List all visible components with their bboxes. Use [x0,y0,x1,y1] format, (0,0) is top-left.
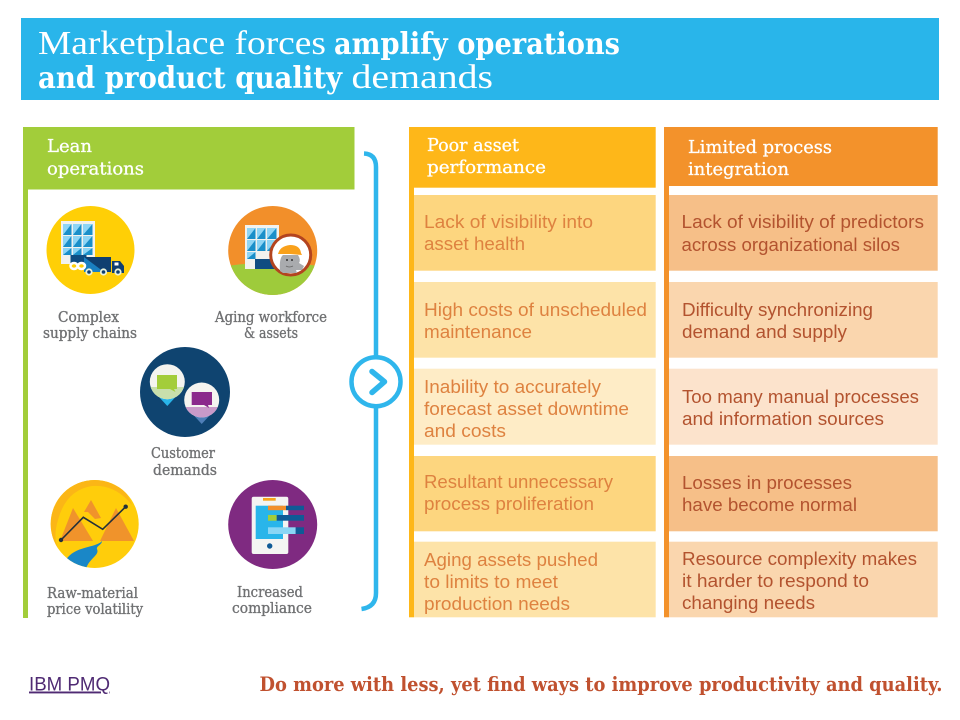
item: resource complexity [669,542,938,617]
title text [38,25,620,96]
item: losses in processes: Losses in processes [682,472,852,493]
icon: complex supply chains [46,206,134,294]
limited process integration heading [664,127,938,186]
panel: lean operations [23,127,354,618]
item: resultant process proliferation [414,456,656,531]
item: resource complexity: it harder to respond to [682,570,869,591]
panel left bar [23,127,28,618]
poor asset performance heading: Poor asset [427,135,520,156]
label: customer demands: demands [153,463,217,479]
label: raw-material price volatility: Raw-material [47,586,138,602]
poor asset performance heading: performance [427,157,546,178]
item: aging assets pushed: production needs [424,593,570,614]
item: losses in processes [669,456,938,531]
poor asset performance heading [409,127,656,188]
item: aging assets pushed: Aging assets pushed [424,549,598,570]
item: inability to forecast: and costs [424,420,506,441]
item: inability to forecast: Inability to accurately [424,376,602,397]
lean operations heading: operations [47,158,144,180]
item: inability to forecast [414,369,656,445]
panel: limited process integration [664,127,938,617]
item: resource complexity: changing needs [682,592,815,613]
item: high costs of unscheduled maintenance: maintenance [424,321,532,342]
label: complex supply chains: supply chains [43,326,137,342]
item: lack of visibility of predictors [669,195,938,271]
limited process integration heading: integration [688,159,789,180]
item: aging assets pushed [414,542,656,617]
link: IBM PMQ: IBM PMQ [29,674,110,696]
item: lack of visibility into asset health: asset health [424,233,525,254]
label: raw-material price volatility [47,586,144,618]
icon: aging workforce and assets [226,206,320,297]
item: aging assets pushed: to limits to meet [424,571,558,592]
arrow: bracket with chevron [352,154,400,609]
item: resource complexity: Resource complexity makes [682,548,917,569]
item: difficulty synchronizing: demand and supply [682,321,848,342]
label: aging workforce and assets: & assets [244,326,298,342]
item: losses in processes: have become normal [682,494,857,515]
item: resultant process proliferation: Resultant unnecessary [424,471,614,492]
icon: increased compliance [228,480,317,569]
label: complex supply chains [43,310,137,342]
title text: Marketplace forces [38,25,326,62]
item: too many manual processes [669,369,938,445]
item: too many manual processes: and information sources [682,408,884,429]
item: high costs of unscheduled maintenance [414,282,656,358]
label: raw-material price volatility: price volatility [47,602,144,618]
label: aging workforce and assets [214,310,327,342]
item: lack of visibility of predictors: Lack of visibility of predictors [682,211,924,232]
item: high costs of unscheduled maintenance: High costs of unscheduled [424,299,647,320]
label: complex supply chains: Complex [58,310,119,326]
title text: demands [352,59,493,96]
item: lack of visibility into asset health: Lack of visibility into [424,211,593,232]
label: increased compliance [232,585,312,617]
column left bar [409,127,414,617]
title banner [21,18,939,100]
column left bar [664,127,669,617]
title text: and product quality [38,61,343,96]
lean operations heading: Lean [47,136,92,157]
icon: customer demands [140,347,230,437]
icon: raw-material price volatility [50,480,139,572]
panel: poor asset performance [409,127,656,617]
title text: amplify operations [334,27,620,62]
item: too many manual processes: Too many manual processes [682,386,919,407]
item: lack of visibility into asset health [414,195,656,271]
item: difficulty synchronizing [669,282,938,358]
limited process integration heading: Limited process [688,137,832,158]
label: increased compliance: compliance [232,601,312,617]
item: resultant process proliferation: process proliferation [424,493,594,514]
item: inability to forecast: forecast asset downtime [424,398,629,419]
label: increased compliance: Increased [237,585,303,601]
label: customer demands: Customer [151,446,215,462]
item: difficulty synchronizing: Difficulty synchronizing [682,299,873,320]
label: customer demands [151,446,217,479]
lean operations heading [23,127,354,190]
item: lack of visibility of predictors: across organizational silos [682,234,900,255]
label: aging workforce and assets: Aging workforce [214,310,327,326]
